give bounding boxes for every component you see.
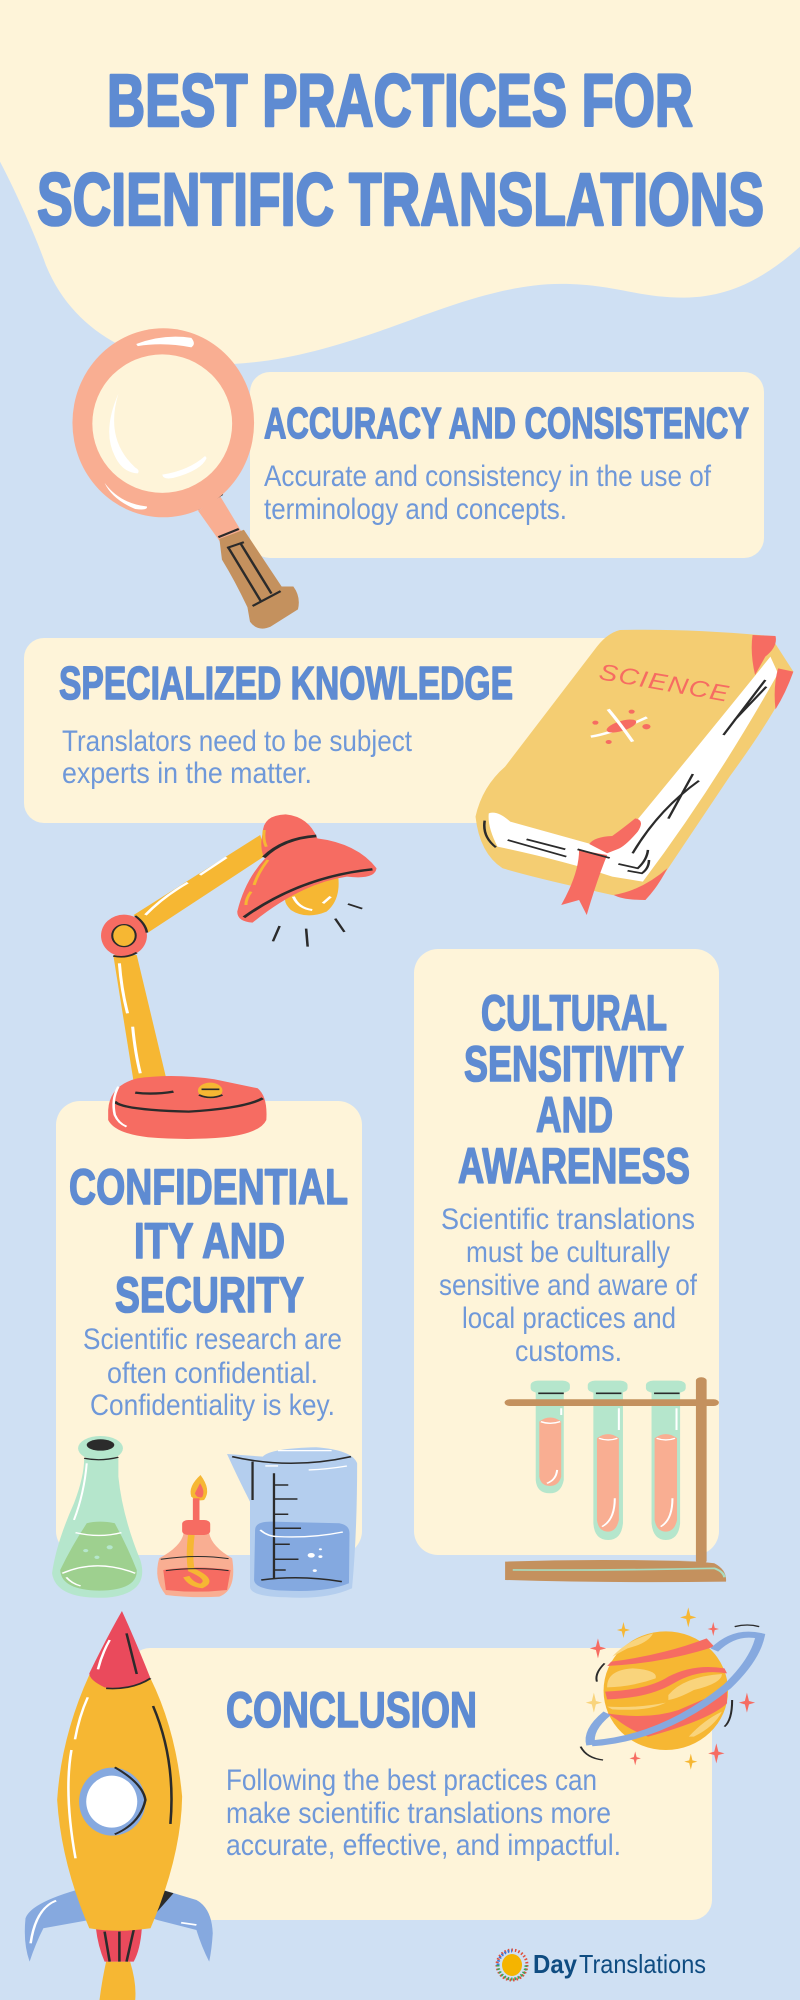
body: specialized: [62, 725, 413, 790]
icon: beaker: [227, 1447, 357, 1598]
body: accuracy: [264, 460, 712, 526]
heading: confidentiality: SECURITY: [115, 1267, 304, 1323]
body: cultural: local practices and: [462, 1302, 676, 1335]
body: specialized: experts in the matter.: [62, 757, 312, 790]
body: accuracy: Accurate and consistency in the use of: [264, 460, 712, 493]
icon: glassware: [52, 1436, 357, 1598]
body: cultural: customs.: [515, 1335, 622, 1368]
logo: Day Translations: [497, 1949, 706, 1980]
panel: cultural sensitivity: [414, 949, 719, 1555]
icon: burner: [157, 1475, 233, 1597]
panel: specialized knowledge: [24, 638, 644, 823]
heading: cultural: SENSITIVITY: [464, 1036, 684, 1092]
panel: conclusion: [130, 1648, 712, 1920]
body: conclusion: [226, 1764, 621, 1862]
body: conclusion: make scientific translations more: [226, 1797, 611, 1830]
icon: planet: [581, 1607, 760, 1770]
panel: accuracy and consistency: [250, 372, 764, 558]
body: cultural: [439, 1203, 698, 1368]
heading: confidentiality: ITY AND: [134, 1213, 285, 1269]
body: specialized: Translators need to be subject: [62, 725, 413, 758]
heading: specialized: SPECIALIZED KNOWLEDGE: [59, 657, 513, 709]
body: confidentiality: Scientific research are: [83, 1323, 342, 1356]
body: conclusion: accurate, effective, and impactful.: [226, 1829, 621, 1862]
body: confidentiality: often confidential.: [107, 1357, 318, 1390]
body: conclusion: Following the best practices can: [226, 1764, 597, 1797]
icon: science book: SCIENCE: [597, 658, 732, 707]
heading: cultural: CULTURAL: [481, 985, 667, 1041]
icon: test tubes on rack: [505, 1377, 726, 1582]
logo: Day Translations: Day: [533, 1949, 577, 1979]
icon: desk lamp: [101, 814, 377, 1139]
title: [37, 59, 764, 241]
body: cultural: must be culturally: [466, 1236, 670, 1269]
heading: confidentiality: [69, 1159, 348, 1323]
body: confidentiality: [83, 1323, 342, 1422]
heading: cultural: AND: [536, 1087, 613, 1143]
background blob: [0, 0, 800, 364]
icon: flask: [52, 1436, 142, 1598]
heading: confidentiality: CONFIDENTIAL: [69, 1159, 348, 1215]
body: accuracy: terminology and concepts.: [264, 493, 567, 526]
heading: cultural: [458, 985, 690, 1194]
heading: cultural: AWARENESS: [458, 1138, 690, 1194]
logo: Day Translations: Translations: [579, 1949, 706, 1979]
icon: science book: [476, 630, 793, 915]
heading: conclusion: CONCLUSION: [226, 1682, 477, 1738]
panel: confidentiality: [56, 1101, 362, 1555]
icon: magnifying glass: [72, 328, 299, 629]
icon: rocket: [25, 1611, 213, 2000]
body: cultural: Scientific translations: [441, 1203, 695, 1236]
body: confidentiality: Confidentiality is key.: [90, 1389, 335, 1422]
body: cultural: sensitive and aware of: [439, 1269, 698, 1302]
